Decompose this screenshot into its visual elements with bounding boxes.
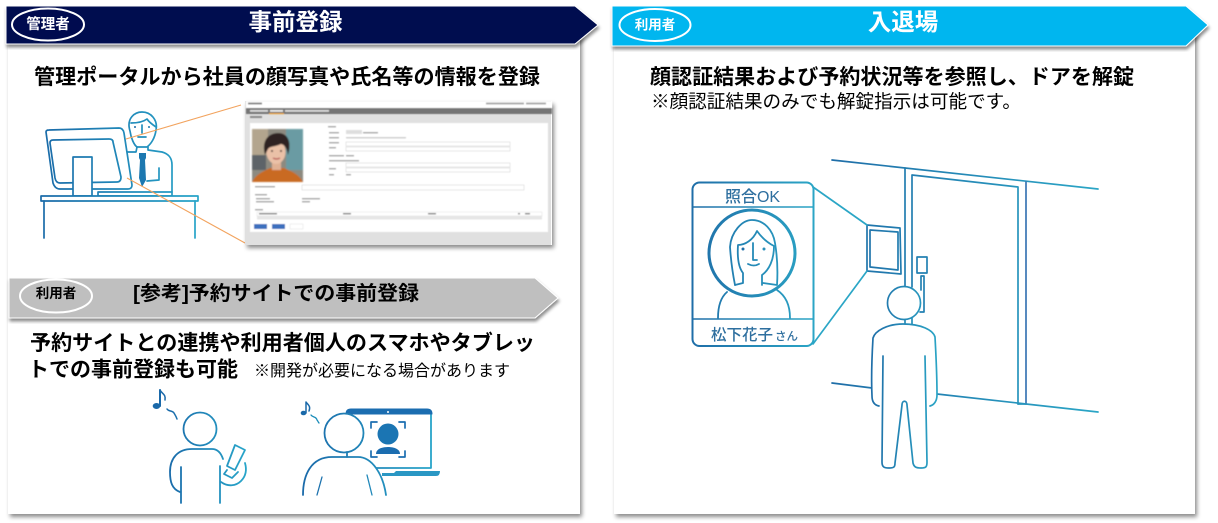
screenshot: admin portal bbox=[245, 101, 552, 245]
label: 照合OK: 照合OK bbox=[725, 188, 780, 206]
callout connector lines bbox=[813, 187, 867, 344]
text: site integration description: トでの事前登録も可能 bbox=[28, 358, 238, 382]
text: face authentication description bbox=[650, 66, 1134, 112]
wall reader bbox=[867, 225, 901, 274]
badge: 利用者 bbox=[620, 9, 690, 41]
badge: 管理者 bbox=[12, 8, 84, 40]
face scan icon bbox=[371, 422, 405, 457]
heading: 事前登録: 事前登録 bbox=[248, 9, 343, 35]
connector lines bbox=[126, 105, 245, 243]
illustration: door and wall bbox=[832, 160, 1098, 412]
heading: 入退場: 入退場 bbox=[868, 9, 938, 35]
panel: right entry/exit bbox=[612, 6, 1208, 514]
portrait icon bbox=[709, 210, 795, 318]
label: name: 松下花子さん bbox=[711, 326, 798, 344]
door handle and plate bbox=[917, 257, 927, 312]
header: 事前登録 bbox=[6, 6, 598, 44]
text: site integration description: ※開発が必要になる場合があります bbox=[254, 362, 510, 380]
text: site integration description bbox=[28, 331, 535, 382]
badge: 管理者: 管理者 bbox=[26, 15, 70, 33]
laptop bbox=[346, 409, 440, 476]
person from behind bbox=[872, 286, 937, 468]
badge: 利用者: 利用者 bbox=[36, 285, 76, 301]
badge: 利用者: 利用者 bbox=[635, 16, 675, 32]
buttons bbox=[254, 224, 303, 229]
panel: left pre-registration bbox=[6, 6, 598, 514]
icon: person at desk with monitor bbox=[41, 112, 198, 238]
photo: employee portrait bbox=[252, 129, 303, 182]
icon: music note small bbox=[306, 402, 310, 413]
text: face authentication description: ※顔認証結果のみでも解錠指示は可能です。 bbox=[651, 91, 1021, 112]
text: site integration description: 予約サイトとの連携や利用者個人のスマホやタブレッ bbox=[30, 331, 535, 355]
badge: 利用者 bbox=[20, 280, 92, 312]
header: reference pre-registration banner bbox=[9, 278, 558, 318]
text: admin portal description: 管理ポータルから社員の顔写真や氏名等の情報を登録 bbox=[34, 66, 540, 89]
heading: reference pre-registration: [参考]予約サイトでの事前登録 bbox=[133, 282, 419, 305]
form fields bbox=[302, 142, 524, 190]
icon: music note bbox=[159, 390, 161, 406]
icon: person with laptop bbox=[301, 402, 440, 495]
callout: match result card bbox=[692, 182, 814, 346]
header: 入退場 bbox=[612, 6, 1208, 46]
table bbox=[257, 212, 542, 220]
text: face authentication description: 顔認証結果および予約状況等を参照し、ドアを解錠 bbox=[650, 66, 1134, 89]
icon: person with smartphone bbox=[153, 390, 246, 503]
